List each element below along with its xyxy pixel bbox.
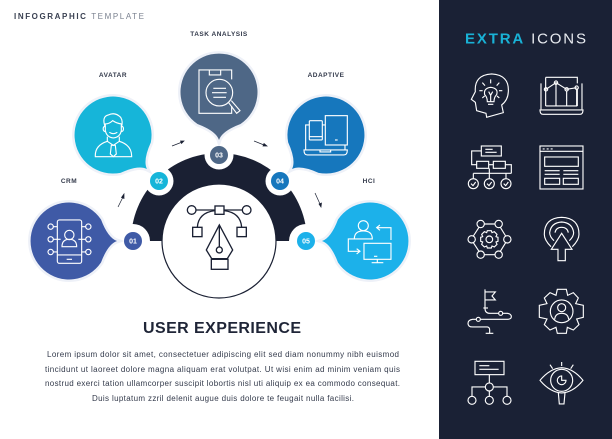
bubble: Task Analysis — [180, 54, 258, 140]
icon: eye — [540, 362, 583, 404]
arrow: 04 to 05 — [315, 193, 322, 207]
icon: responsive devices — [304, 116, 347, 155]
icon: browser wireframe — [540, 146, 583, 189]
badge 01: 01 — [129, 238, 137, 246]
badge 04: 04 — [276, 178, 284, 186]
bubble: HCI — [322, 202, 408, 280]
icon: avatar person — [95, 114, 132, 157]
badge 02: 02 — [155, 178, 163, 186]
body text: nostrud exerci tation ullamcorper suscipit lobortis nisl uti aliquip ex ea commodo consequat. — [45, 379, 400, 388]
badge 03: 03 — [215, 152, 223, 160]
badge 05 — [297, 232, 315, 250]
badge 03 — [210, 146, 228, 164]
icon: human computer interaction — [348, 221, 391, 263]
icon: laptop with chart — [540, 77, 583, 114]
label: HCI: HCI — [363, 178, 375, 185]
bubble: Adaptive — [265, 81, 380, 196]
body text: tincidunt ut laoreet dolore magna aliquam erat volutpat. Ut wisi enim ad minim veniam quis — [45, 365, 400, 374]
icon: gear with user — [539, 289, 583, 333]
label: Adaptive: ADAPTIVE — [308, 72, 345, 79]
icon: org structure — [468, 361, 511, 404]
body text: Lorem ipsum dolor sit amet, consectetuer adipiscing elit sed diam nonummy nibh euismod — [47, 350, 399, 359]
badge 01 — [124, 232, 142, 250]
central semicircle diagram — [116, 140, 323, 298]
body text: Duis luptatum zzril delenit augue duis dolore te feugait nulla facilisi. — [92, 394, 354, 403]
label: Task Analysis: TASK ANALYSIS — [190, 31, 248, 38]
icon: flag route — [468, 289, 511, 333]
title: USER EXPERIENCE — [143, 320, 301, 337]
icon: target with cursor — [544, 217, 579, 261]
body text — [45, 350, 400, 403]
icon: gear network — [468, 220, 511, 258]
badge 04 — [271, 172, 289, 190]
icon: head with light bulb — [471, 74, 508, 117]
label: Avatar: AVATAR — [99, 72, 127, 79]
icon: flow chart — [468, 146, 511, 189]
icon: CRM phone — [48, 220, 91, 263]
arrow: 02 to 03 — [172, 141, 184, 146]
arrow: 01 to 02 — [118, 194, 124, 207]
badge 02 — [150, 172, 168, 190]
panel heading: EXTRA ICONS — [465, 30, 586, 48]
panel: extra icons — [439, 0, 612, 439]
icon: document with magnifier — [199, 70, 240, 113]
arrow: 03 to 04 — [254, 141, 267, 146]
bubble: Avatar — [59, 81, 174, 196]
bubble: CRM — [31, 202, 117, 280]
badge 05: 05 — [302, 238, 310, 246]
label: CRM: CRM — [61, 178, 77, 185]
icon: pen tool — [187, 206, 251, 269]
header label: INFOGRAPHIC TEMPLATE — [14, 12, 144, 21]
